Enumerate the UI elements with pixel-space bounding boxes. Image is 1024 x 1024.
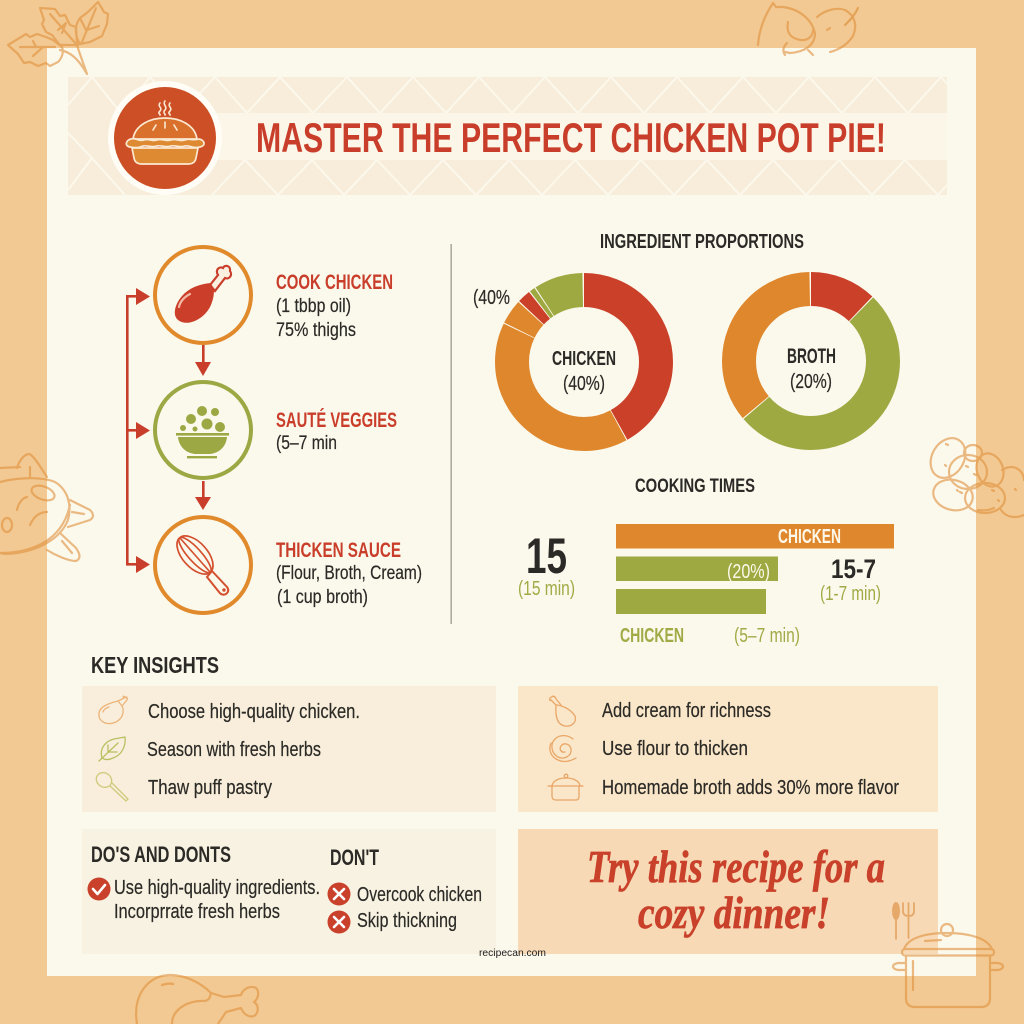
step 3 text: (1 cup broth) <box>277 587 368 608</box>
icon: pie badge <box>108 81 222 195</box>
step 3 text <box>276 539 422 608</box>
donut chart: chicken <box>512 290 656 434</box>
stat: 15-7 minutes: 15-7 <box>831 554 876 584</box>
donut chart: broth <box>739 289 883 433</box>
bar chart: cooking times: CHICKEN <box>620 625 684 647</box>
stat: 15 minutes: 15 <box>526 528 567 584</box>
arrows: process flow <box>126 288 211 573</box>
panel: call to action <box>518 829 938 954</box>
bar chart: cooking times: (20%) <box>727 561 770 583</box>
decoration: herb leaves <box>8 2 108 74</box>
panel: insights right: Add cream for richness <box>602 700 771 722</box>
icon: cross one <box>328 882 350 906</box>
panel: insights right: Use flour to thicken <box>602 738 748 760</box>
panel: insights left <box>82 686 496 812</box>
heading: cooking times: COOKING TIMES <box>635 476 755 497</box>
icon: step 3 whisk <box>155 517 251 613</box>
callout: 40 percent: (40% <box>473 287 510 309</box>
icon: check <box>88 878 110 900</box>
icon: herb leaf <box>99 737 125 761</box>
heading: ingredient proportions: INGREDIENT PROPORTIONS <box>600 231 804 253</box>
stat: 15 minutes: (15 min) <box>518 578 575 600</box>
panel: insights left: Choose high-quality chicken. <box>148 701 360 723</box>
icon: drumstick outline right <box>550 696 575 726</box>
icon: cooking pot small <box>548 774 583 800</box>
step 1 text <box>276 271 393 341</box>
step 2 text: (5–7 min <box>276 433 337 454</box>
header banner <box>68 77 947 195</box>
panel: do's and don'ts: DON'T <box>330 845 379 870</box>
icon: flour spiral <box>550 736 576 761</box>
bar chart: cooking times: (5–7 min) <box>734 625 800 647</box>
panel: do's and don'ts: Use high-quality ingredients. <box>114 877 320 899</box>
decoration: potatoes outline right <box>924 432 1024 517</box>
step 2 text: SAUTÉ VEGGIES <box>276 409 397 432</box>
decoration: chicken outline top <box>758 3 858 55</box>
step 1 text: 75% thighs <box>276 320 356 341</box>
step 1 text: (1 tbbp oil) <box>276 296 351 317</box>
icon: step 2 veggie bowl <box>155 382 251 478</box>
panel: do's and don'ts: Overcook chicken <box>357 884 482 906</box>
bar chart: cooking times <box>616 524 894 647</box>
panel: insights right <box>518 686 938 812</box>
step 2 text <box>276 409 397 454</box>
step 3 text: (Flour, Broth, Cream) <box>276 563 422 584</box>
panel: insights right: Homemade broth adds 30% more flavor <box>602 777 899 799</box>
panel: call to action: Try this recipe for a <box>587 841 885 892</box>
step 1 text: COOK CHICKEN <box>276 271 393 294</box>
watermark: recipecan.com <box>479 948 546 959</box>
donut label: broth: BROTH <box>787 345 836 368</box>
bar chart: cooking times: CHICKEN <box>778 526 841 548</box>
panel: do's and don'ts: Skip thickning <box>357 910 457 932</box>
panel: insights left: Season with fresh herbs <box>147 739 321 761</box>
icon: spoon <box>93 770 128 801</box>
step 3 text: THICKEN SAUCE <box>276 539 401 562</box>
icon: cross two <box>328 910 350 934</box>
heading: key insights: KEY INSIGHTS <box>91 652 219 678</box>
panel: do's and don'ts <box>82 829 496 954</box>
stat: 15-7 minutes <box>820 554 881 605</box>
stat: 15-7 minutes: (1-7 min) <box>820 583 881 605</box>
icon: step 1 chicken leg <box>155 247 251 343</box>
panel: do's and don'ts: Incorprrate fresh herbs <box>114 901 280 923</box>
donut label: broth <box>787 345 836 393</box>
icon: drumstick outline <box>99 696 127 724</box>
stat: 15 minutes <box>518 528 575 600</box>
decoration: large pot outline <box>893 924 1003 1007</box>
donut label: broth: (20%) <box>790 371 832 393</box>
panel: do's and don'ts: DO'S AND DONTS <box>91 842 231 867</box>
donut label: chicken <box>552 348 616 395</box>
decoration: drumstick outline bottom <box>136 975 258 1024</box>
icon: fork and spoon <box>892 902 914 939</box>
donut label: chicken: CHICKEN <box>552 348 616 370</box>
panel: call to action: cozy dinner! <box>638 887 830 938</box>
donut label: chicken: (40%) <box>563 373 605 395</box>
decoration: pastry creature outline left <box>0 454 93 561</box>
panel: insights left: Thaw puff pastry <box>148 777 272 799</box>
